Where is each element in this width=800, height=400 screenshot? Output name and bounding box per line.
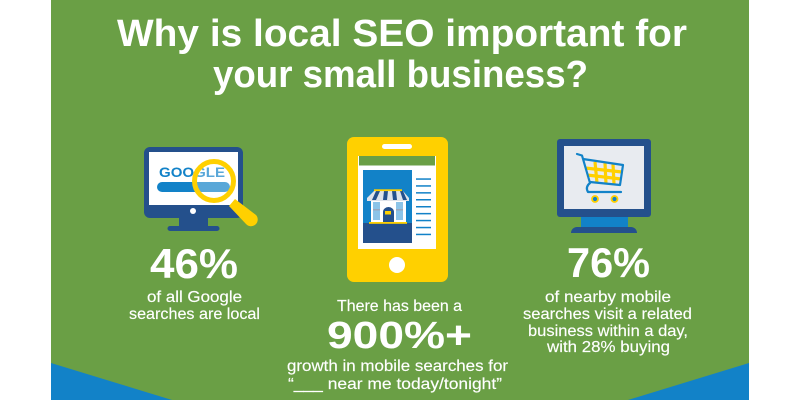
monitor body [144,147,243,218]
stat: 46%: searches are local [129,306,260,323]
stat: 76%: of nearby mobile [545,289,671,306]
stat: 900%+: There has been a [337,298,462,315]
phone body [347,137,448,282]
monitor stand [168,216,220,231]
store ground [363,223,412,243]
stat: 46%: 46% [150,240,238,287]
stat: 900%+: 900%+ [327,315,472,357]
google wordmark: GOOGLE [159,164,225,180]
title [117,13,687,96]
stat: 76%: searches visit a related [523,306,692,323]
text lines [416,178,431,235]
stat: 46% [129,240,260,323]
power dot [190,208,196,214]
icon: monitor with magnifier [144,147,258,231]
stat: 900%+: “___ near me today/tonight” [288,376,502,393]
blue corner left [51,363,172,400]
monitor screen [149,152,238,205]
monitor stand [581,215,628,228]
search bar [157,182,230,192]
monitor screen [564,146,644,209]
magnifier lens [194,162,234,200]
storefront [367,189,409,224]
stat: 76%: business within a day, [528,323,688,340]
store image background [363,170,412,243]
blue corner right [628,363,749,400]
title: Why is local SEO important for [117,13,687,55]
magnifier handle [229,199,258,226]
stat: 76% [523,239,692,356]
speaker [382,144,412,149]
icon: phone with storefront [347,137,448,282]
home button [389,257,405,273]
stat: 900%+ [287,298,509,393]
stat: 46%: of all Google [147,289,242,306]
title: your small business? [213,54,588,96]
cart wheels [592,196,618,202]
monitor body [557,139,651,217]
stat: 76%: with 28% buying [546,339,670,356]
cart basket yellow grid [585,162,622,184]
cart frame [577,154,623,192]
screen header [359,156,435,166]
phone screen [358,156,436,249]
stat: 76%: 76% [567,239,650,286]
icon: monitor with shopping cart [557,139,651,233]
monitor base [571,227,637,233]
stat: 900%+: growth in mobile searches for [287,358,509,375]
